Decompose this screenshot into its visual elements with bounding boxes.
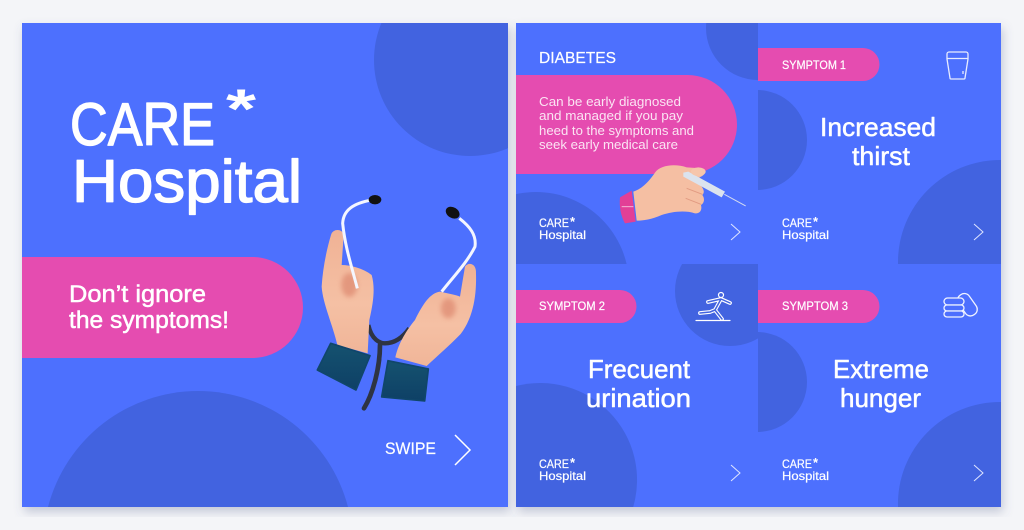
- logo: CARE: [539, 216, 569, 230]
- arrow: [731, 224, 740, 240]
- logo: CARE: [782, 457, 812, 471]
- diabetes pink callout: seek early medical care: [539, 137, 678, 152]
- logo: Hospital: [782, 228, 829, 242]
- symptom 2 label: SYMPTOM 2: [539, 299, 605, 313]
- symptom 2 text: [586, 354, 691, 413]
- arrow: swipe chevron: [455, 435, 470, 465]
- arrow: [974, 224, 983, 240]
- cover title: *: [226, 77, 256, 140]
- swipe prompt: [385, 435, 470, 465]
- logo: [539, 214, 586, 242]
- panel: symptom 3: [758, 290, 1001, 507]
- logo: CARE: [782, 216, 812, 230]
- icon: macarons: [944, 291, 980, 318]
- symptom 2 text: urination: [586, 383, 691, 413]
- logo: *: [813, 214, 819, 229]
- cover title: Hospital: [72, 148, 302, 215]
- panel group: right side cards: [514, 23, 1008, 516]
- illustration: hand with syringe: [620, 165, 746, 223]
- symptom 2 label: [516, 290, 637, 323]
- logo: [782, 214, 829, 242]
- icon: glass of water: [947, 52, 968, 79]
- panel: cover: [20, 23, 514, 516]
- symptom 2 text: Frecuent: [588, 354, 691, 384]
- diabetes pink callout: and managed if you pay: [539, 108, 684, 123]
- logo: Hospital: [539, 228, 586, 242]
- diabetes pink callout: heed to the symptoms and: [539, 123, 694, 138]
- logo: *: [813, 455, 819, 470]
- icon: running person: [696, 292, 730, 320]
- logo: *: [570, 214, 576, 229]
- cover title: [70, 77, 302, 215]
- symptom 3 text: hunger: [840, 383, 921, 413]
- cover pink banner: [22, 257, 303, 358]
- symptom 1 text: thirst: [852, 141, 911, 171]
- symptom 1 text: [820, 112, 936, 171]
- cover pink banner: Don’t ignore: [69, 281, 206, 308]
- panel: symptom 2: [516, 264, 758, 507]
- arrow: [731, 465, 740, 481]
- diabetes pink callout: [516, 75, 737, 174]
- logo: Hospital: [539, 469, 586, 483]
- logo: CARE: [539, 457, 569, 471]
- swipe prompt: SWIPE: [385, 439, 436, 458]
- panel: diabetes: [516, 23, 758, 264]
- logo: [782, 455, 829, 483]
- cover title: CARE: [70, 91, 215, 158]
- diabetes pink callout: Can be early diagnosed: [539, 94, 681, 109]
- symptom 3 label: [758, 290, 880, 323]
- illustration: hands holding stethoscope: [317, 195, 476, 408]
- arrow: [974, 465, 983, 481]
- symptom 1 label: SYMPTOM 1: [782, 58, 846, 72]
- symptom 3 text: Extreme: [833, 354, 929, 384]
- symptom 3 text: [833, 354, 929, 413]
- symptom 3 label: SYMPTOM 3: [782, 299, 848, 313]
- logo: Hospital: [782, 469, 829, 483]
- symptom 1 label: [758, 48, 880, 81]
- symptom 1 text: Increased: [820, 112, 936, 142]
- cover pink banner: the symptoms!: [69, 307, 229, 334]
- logo: *: [570, 455, 576, 470]
- panel: symptom 1: [758, 48, 1001, 264]
- diabetes heading: DIABETES: [539, 50, 616, 67]
- logo: [539, 455, 586, 483]
